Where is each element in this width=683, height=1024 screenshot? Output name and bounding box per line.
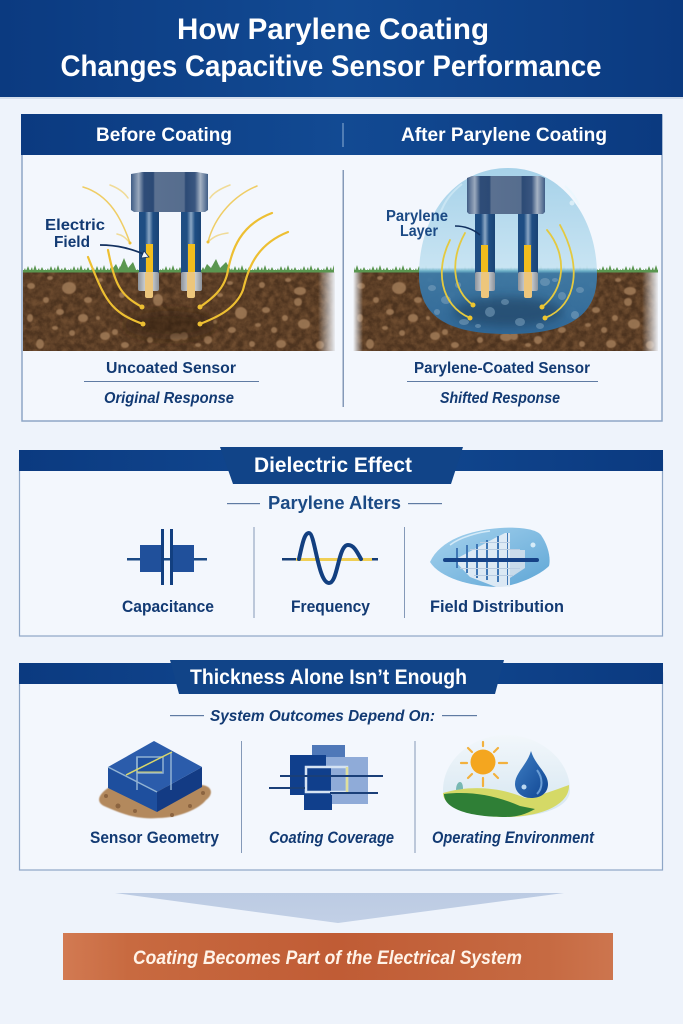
subheading: system outcomes: System Outcomes Depend On: xyxy=(210,708,435,725)
arrow: down to conclusion xyxy=(115,893,564,923)
label: parylene-coated sensor: Parylene-Coated Sensor xyxy=(414,360,590,377)
icon: coating coverage xyxy=(269,745,383,810)
label: operating environment: Operating Environment xyxy=(432,828,595,847)
field lines xyxy=(83,185,288,326)
label: capacitance: Capacitance xyxy=(122,597,214,616)
field lines xyxy=(442,225,574,320)
illustration: parylene coated sensor in soil xyxy=(353,168,659,351)
heading: before coating: Before Coating xyxy=(96,125,232,146)
callout: electric field: Field xyxy=(54,234,90,251)
title line 1: How Parylene Coating xyxy=(177,13,489,46)
heading tab: dielectric effect xyxy=(220,447,463,484)
label: field distribution: Field Distribution xyxy=(430,597,564,616)
icon: capacitor xyxy=(127,529,207,585)
icon: operating environment xyxy=(443,735,570,817)
panel: thickness alone is not enough xyxy=(19,660,663,870)
illustration: uncoated sensor in soil xyxy=(23,172,336,351)
label: sensor geometry: Sensor Geometry xyxy=(90,828,219,847)
label: frequency: Frequency xyxy=(291,597,370,616)
callout: parylene layer: Parylene xyxy=(386,208,448,225)
heading tab: dielectric effect: Dielectric Effect xyxy=(254,454,412,477)
label: uncoated sensor: Uncoated Sensor xyxy=(106,360,236,377)
conclusion text: Coating Becomes Part of the Electrical System xyxy=(133,948,522,969)
subheading: parylene alters: Parylene Alters xyxy=(268,493,401,513)
callout: electric field xyxy=(45,217,149,258)
icon: sensor geometry xyxy=(99,741,211,818)
callout: conclusion banner xyxy=(63,933,613,980)
label: original response: Original Response xyxy=(104,390,234,407)
icon: frequency wave xyxy=(282,533,378,583)
icon: coated sensor body xyxy=(467,176,545,298)
panel: before and after comparison xyxy=(21,114,662,421)
callout: parylene layer: Layer xyxy=(400,223,438,240)
label: shifted response: Shifted Response xyxy=(440,390,560,407)
panel: dielectric effect xyxy=(19,447,663,636)
title line 2: Changes Capacitive Sensor Performance xyxy=(60,50,602,83)
icon: sensor body xyxy=(131,172,208,298)
icon: field distribution xyxy=(430,528,550,587)
coating dome xyxy=(419,168,597,334)
callout: electric field: Electric xyxy=(45,217,105,234)
heading tab: thickness alone isn't enough: Thickness Alone Isn’t Enough xyxy=(190,666,467,689)
label: coating coverage: Coating Coverage xyxy=(269,828,394,847)
heading: after parylene coating: After Parylene Coating xyxy=(401,125,607,146)
heading tab: thickness alone isn't enough xyxy=(170,660,504,694)
title banner xyxy=(0,0,683,99)
callout: parylene layer xyxy=(386,208,480,240)
